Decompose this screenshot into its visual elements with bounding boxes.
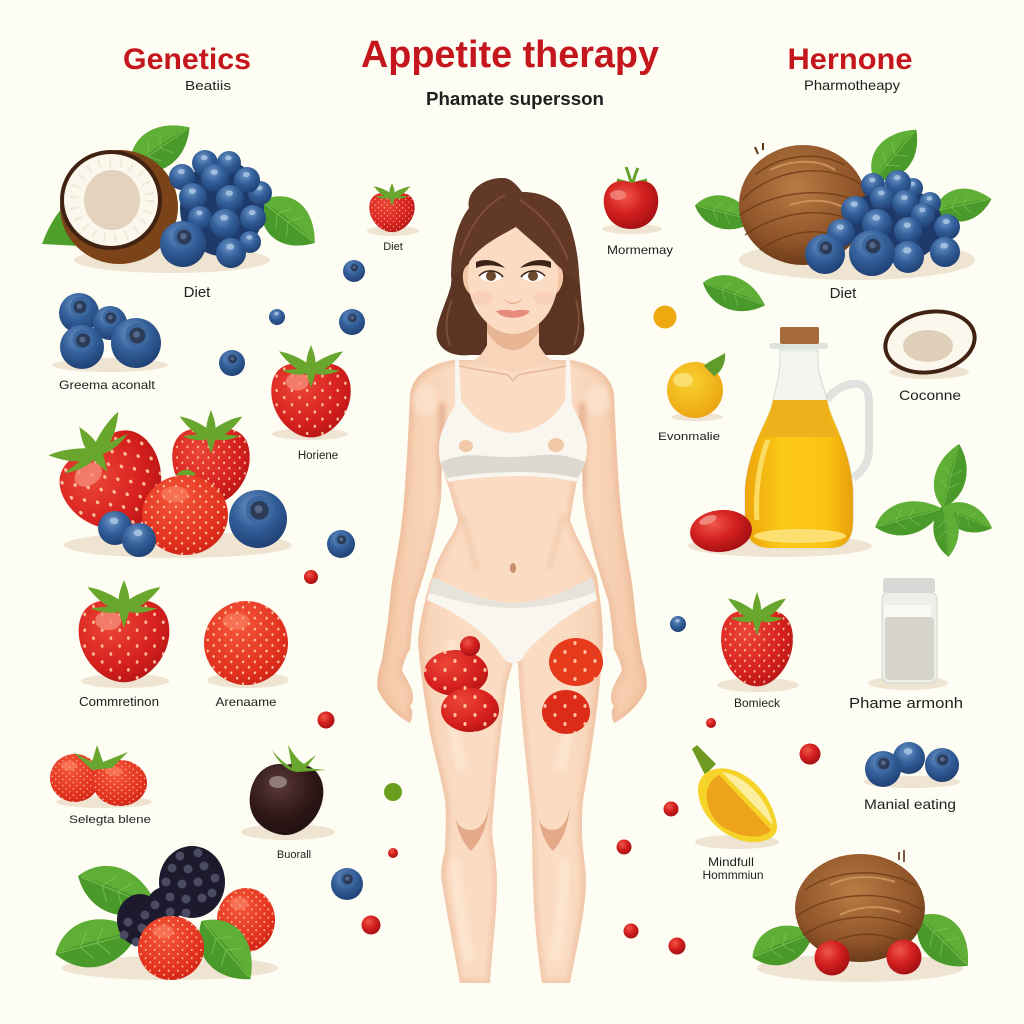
neck shadow (487, 322, 539, 350)
label: selegta blene: Selegta blene (69, 814, 151, 826)
label: diet small: Diet (383, 241, 403, 253)
blush (471, 291, 555, 305)
hair back (437, 178, 584, 355)
label: commretinon: Commretinon (79, 695, 159, 709)
food group: coconut and blueberries, top left (42, 111, 328, 273)
dark berry: buorall (241, 745, 335, 840)
blueberry beside figure (327, 530, 355, 558)
body (377, 360, 647, 983)
body edge shading (377, 360, 647, 983)
food group: strawberries, left (36, 400, 292, 558)
blueberry scatter near head (219, 260, 365, 376)
nose (504, 298, 522, 304)
title: Appetite therapy (361, 34, 659, 76)
neck (468, 318, 558, 372)
label: mindfull hommmiun: Mindfull (708, 855, 754, 869)
heading: hormone: Hernone (788, 43, 912, 76)
strawberry: horiene (271, 345, 351, 440)
face (468, 222, 558, 334)
label: bomieck: Bomieck (734, 696, 781, 710)
strawberry patches on thighs (424, 636, 603, 734)
label: buorall: Buorall (277, 849, 311, 861)
icon: leaf (698, 267, 771, 320)
food group: coconut, bottom right (745, 850, 983, 982)
ears (463, 264, 563, 296)
top garment (439, 358, 587, 482)
heading: genetics: Beatiis (185, 78, 232, 93)
red fruit: hormemay (602, 167, 662, 234)
label: greema aconalt: Greema aconalt (59, 378, 156, 392)
label: arenaame: Arenaame (216, 695, 277, 709)
red and colored berry dots (304, 306, 820, 954)
briefs waistband (429, 577, 596, 608)
icon: three leaves (871, 440, 997, 558)
strawberry: commretinon (79, 580, 169, 688)
knee shading (455, 806, 570, 851)
heading: hormone (788, 43, 912, 93)
label: diet: Diet (184, 284, 211, 301)
yellow fruit (667, 353, 725, 421)
right nipple mark (548, 438, 564, 452)
label: horiene: Horiene (298, 450, 338, 462)
label: evonmalie: Evonmalie (658, 431, 720, 443)
label: coconne: Coconne (899, 387, 961, 403)
vial (868, 578, 948, 690)
food group: blueberries, left (52, 293, 168, 372)
subtitle: Phamate supersson (426, 89, 604, 109)
heading: genetics (123, 43, 251, 93)
left nipple mark (459, 440, 473, 452)
food group: mixed berries, bottom left (49, 846, 278, 993)
strawberry: diet (367, 183, 419, 236)
label: phame armonh: Phame armonh (849, 695, 963, 712)
label: mindfull hommmiun: Hommmiun (702, 868, 764, 882)
heading: genetics: Genetics (123, 43, 251, 76)
strawberry: bomieck (717, 592, 799, 692)
heading: hormone: Pharmotheapy (804, 77, 900, 93)
half coconut (878, 302, 982, 382)
top garment shadow band (441, 455, 585, 478)
hair strands (446, 195, 579, 345)
food group: coconut and blueberries, top right (691, 118, 995, 280)
label: manial eating: Manial eating (864, 796, 956, 812)
blueberries: manial eating (864, 742, 960, 788)
label: hormemay: Mormemay (607, 243, 673, 257)
woman figure (377, 178, 647, 983)
round strawberry: arenaame (204, 601, 289, 688)
eyes and brows (476, 260, 551, 282)
lips (496, 310, 530, 318)
oil bottle (688, 327, 872, 557)
strawberries: selegta blene (50, 745, 152, 808)
navel (510, 563, 516, 573)
lemon wedge (692, 745, 779, 849)
label: diet right: Diet (830, 285, 857, 302)
top hair (451, 178, 579, 285)
briefs (427, 577, 597, 663)
red pod (688, 507, 754, 555)
collarbone lines (456, 365, 570, 381)
label: mindfull hommmiun (702, 855, 764, 882)
